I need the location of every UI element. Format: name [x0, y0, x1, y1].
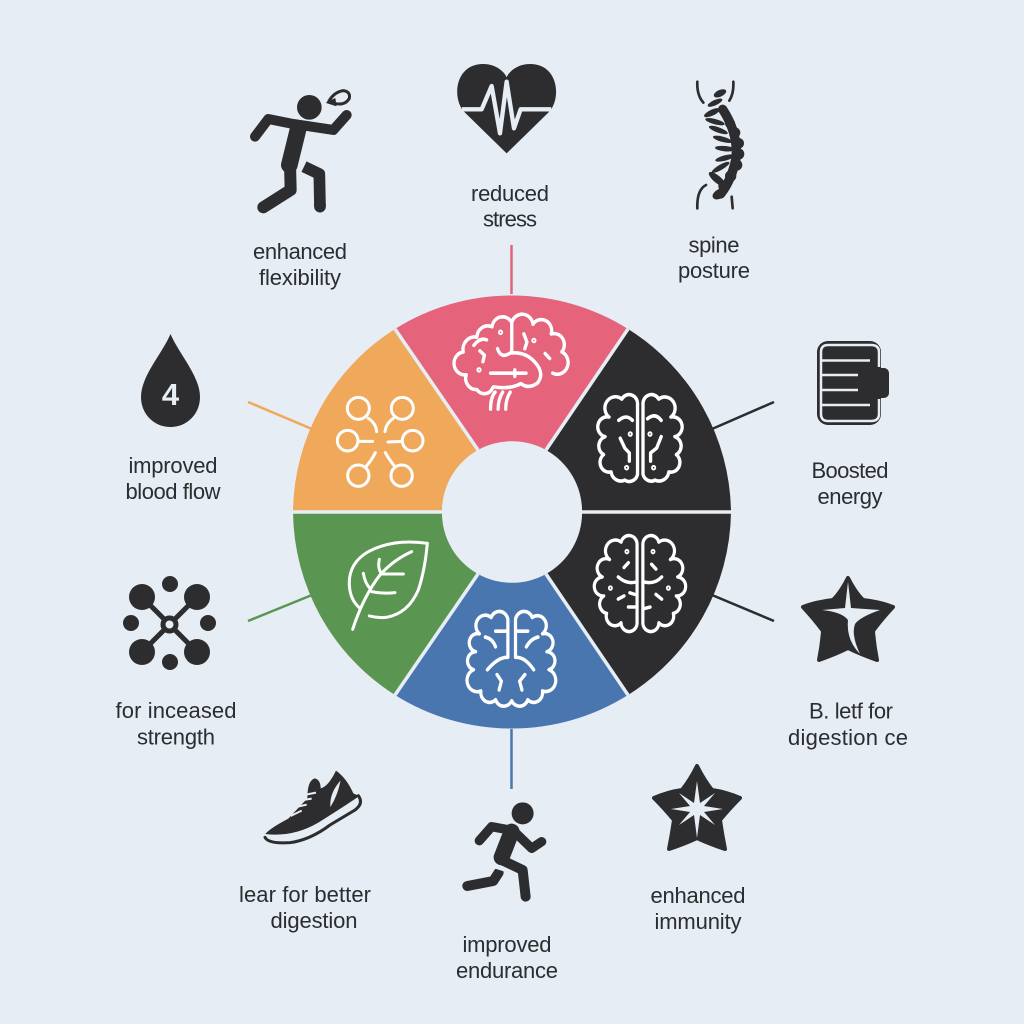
- connector: increased strength: [248, 595, 312, 621]
- segment: pink: [395, 295, 628, 450]
- icon: pink brain side view: [454, 314, 568, 409]
- label: improved blood flow: improved: [128, 453, 218, 478]
- segment: green: [293, 512, 478, 695]
- icon: black brain bottom: [594, 536, 686, 632]
- segment: black lower: [546, 512, 731, 695]
- segment: orange: [293, 329, 478, 512]
- icon: blue brain: [467, 611, 556, 706]
- label: boosted energy: energy: [818, 484, 882, 509]
- icon: strength network: [123, 576, 216, 670]
- label: reduced stress: stress: [483, 206, 537, 232]
- label: enhanced immunity: immunity: [654, 909, 742, 934]
- label: improved endurance: endurance: [456, 958, 558, 983]
- label: spine posture: spine: [688, 232, 740, 258]
- icon: black brain top: [598, 395, 682, 481]
- label: enhanced immunity: enhanced: [650, 883, 746, 908]
- icon: green leaf: [349, 542, 427, 629]
- icon: running shoe: [265, 771, 361, 843]
- icon: star with sparkle: [654, 766, 740, 849]
- connector: reduced stress: [510, 245, 513, 294]
- label: digestion right: B. letf for: [809, 698, 893, 724]
- donut wheel: [290, 295, 734, 729]
- connector: improved endurance: [510, 729, 513, 789]
- label: spine posture: posture: [678, 258, 750, 283]
- label: improved endurance: improved: [462, 932, 552, 957]
- icon: orange network: [337, 397, 423, 486]
- label: reduced stress: reduced: [471, 181, 549, 206]
- label: lear for better digestion: digestion: [270, 908, 358, 933]
- label: enhanced flexibility: flexibility: [259, 265, 341, 290]
- label: boosted energy: Boosted: [812, 458, 888, 483]
- icon: blood drop: [141, 334, 200, 427]
- icon: clipboard energy: [817, 341, 889, 425]
- segment dividers: [290, 329, 734, 695]
- label: for inceased strength: for inceased: [116, 698, 236, 723]
- segment: blue: [395, 574, 628, 729]
- center hole: [442, 442, 582, 582]
- label: lear for better digestion: lear for better: [239, 882, 371, 907]
- connector: improved blood flow: [248, 402, 312, 429]
- icon: heart with pulse: [457, 64, 556, 153]
- icon: star with split: [803, 578, 893, 660]
- drop number: 4: [162, 377, 180, 412]
- segment: black upper: [546, 329, 731, 512]
- icon: runner: [467, 802, 542, 897]
- connector: digestion: [712, 595, 774, 621]
- label: digestion right: digestion ce: [788, 725, 908, 750]
- icon: spine: [697, 82, 744, 208]
- label: enhanced flexibility: enhanced: [253, 239, 347, 264]
- icon: flexibility figure: [255, 91, 350, 207]
- connector: boosted energy: [712, 402, 774, 429]
- label: for inceased strength: strength: [137, 724, 215, 750]
- label: improved blood flow: blood flow: [126, 479, 221, 504]
